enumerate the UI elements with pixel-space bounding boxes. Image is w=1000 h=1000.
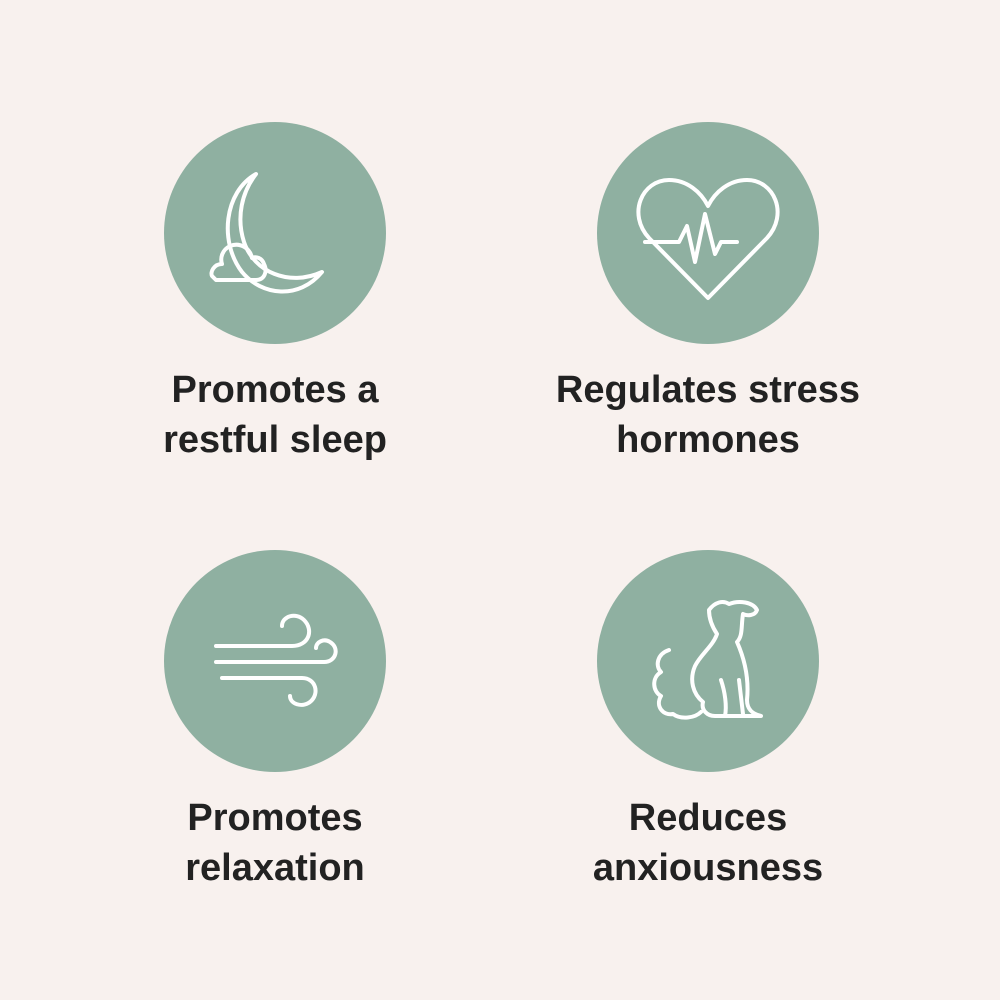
text: relaxation: Promotes — [187, 797, 363, 839]
text: stress: Regulates stress — [556, 369, 860, 411]
panel: stress — [556, 122, 860, 461]
text: anxiousness: anxiousness — [593, 847, 823, 889]
text: relaxation: relaxation — [185, 847, 365, 889]
text: relaxation — [185, 797, 365, 889]
text: anxiousness: Reduces — [629, 797, 787, 839]
panel: relaxation — [164, 550, 386, 889]
icon: heart with pulse — [597, 122, 819, 344]
panel: anxiousness — [593, 550, 823, 889]
text: stress — [556, 369, 860, 461]
text: sleep: restful sleep — [163, 419, 387, 461]
icon: wind — [164, 550, 386, 772]
text: sleep — [163, 369, 387, 461]
icon: moon and cloud — [164, 122, 386, 344]
text: sleep: Promotes a — [172, 369, 378, 411]
panel: sleep — [163, 122, 387, 461]
text: anxiousness — [593, 797, 823, 889]
icon: dog — [597, 550, 819, 772]
text: stress: hormones — [616, 419, 800, 461]
